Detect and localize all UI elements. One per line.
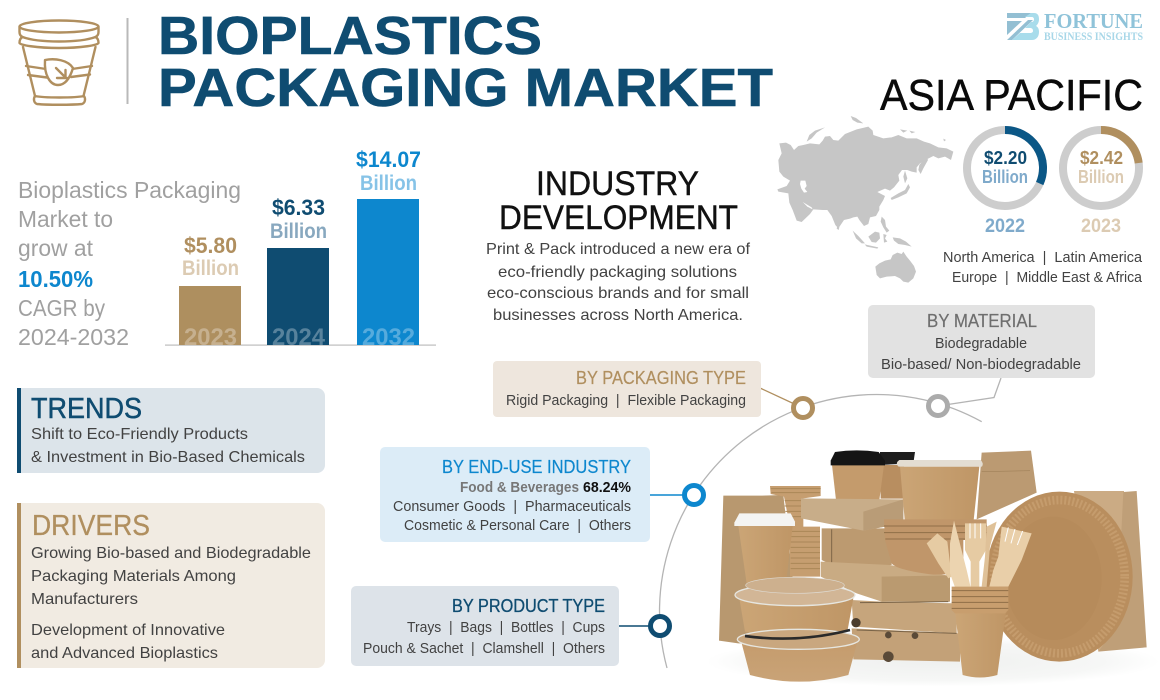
logo: Fortune Business Insights (1007, 9, 1143, 43)
text: other regions: Europe | Middle East & Africa (952, 269, 1143, 286)
text block: industry development: eco-conscious brands and for small (487, 285, 749, 302)
text block: industry development: DEVELOPMENT (499, 199, 738, 237)
text block: industry development: eco-friendly packaging solutions (498, 264, 737, 281)
large bowl with lid (900, 467, 979, 523)
icon: paper cup with leaf (20, 20, 98, 105)
panel: by end-use industry: BY END-USE INDUSTRY (442, 457, 631, 477)
text block: industry development: businesses across North America. (493, 307, 743, 324)
bar: 2023: $5.80 (184, 233, 237, 258)
right paper bag (1074, 491, 1127, 652)
logo: Fortune Business Insights: BUSINESS INSIGHTS (1044, 29, 1143, 43)
text: market growth statement: Market to (18, 206, 113, 232)
bar: 2023 (179, 233, 241, 351)
text: market growth statement: 10.50% (18, 266, 93, 292)
panel: by packaging type: Rigid Packaging | Flexible Packaging (506, 392, 746, 409)
panel: by product type: BY PRODUCT TYPE (452, 596, 605, 616)
back black-lid cup (880, 465, 904, 499)
panel: trends (17, 388, 325, 473)
top paper bag (977, 451, 1037, 519)
chart: 2023 donut: 2023 (1081, 216, 1121, 237)
text: market growth statement (18, 177, 241, 350)
panel: drivers: Growing Bio-based and Biodegradable (31, 545, 311, 562)
chart: 2023 donut (1063, 130, 1139, 237)
marker: packaging type (794, 398, 812, 418)
text: other regions: North America | Latin America (943, 249, 1143, 266)
panel: by end-use industry: Food & Beverages (460, 480, 579, 496)
text: market growth statement: 2024-2032 (18, 324, 129, 350)
bar: 2032: Billion (360, 172, 417, 195)
panel: trends: TRENDS (31, 393, 142, 425)
panel: by material: Biodegradable (935, 335, 1027, 352)
arc connecting segments (619, 378, 1001, 668)
panel: by material (868, 305, 1095, 378)
text: market growth statement: Bioplastics Packaging (18, 177, 241, 203)
chart: 2022 donut (967, 130, 1043, 237)
title: PACKAGING MARKET (158, 58, 773, 118)
panel: by packaging type (493, 361, 761, 417)
panel: trends: Shift to Eco-Friendly Products (31, 426, 248, 443)
front cup with rims (955, 612, 1006, 677)
title: BIOPLASTICS (158, 6, 542, 66)
chart: 2023 donut: $2.42 (1080, 148, 1123, 168)
text: market growth statement: CAGR by (18, 295, 105, 321)
bar: 2023: 2023 (184, 324, 237, 351)
bar chart: market size (165, 147, 436, 351)
marker: end-use industry (684, 486, 704, 504)
title (158, 6, 773, 118)
panel: by product type: Trays | Bags | Bottles | Cups (407, 619, 605, 636)
text: other regions (943, 249, 1143, 286)
bar: 2023: Billion (182, 257, 239, 280)
panel: drivers: Packaging Materials Among (31, 568, 236, 585)
logo: Fortune Business Insights: FORTUNE (1044, 9, 1143, 33)
chart: 2022 donut: $2.20 (984, 148, 1027, 168)
white-lid cup (738, 526, 793, 583)
chart: 2022 donut: 2022 (985, 216, 1025, 237)
panel: drivers (17, 503, 325, 668)
marker: product type (650, 616, 670, 636)
text block: industry development: Print & Pack introduced a new era of (486, 241, 751, 258)
map: Asia Pacific (777, 116, 953, 283)
panel: trends: & Investment in Bio-Based Chemicals (31, 449, 305, 466)
panel: drivers: and Advanced Bioplastics (31, 645, 218, 662)
panel: drivers: Development of Innovative (31, 622, 225, 639)
text block: industry development: INDUSTRY (536, 165, 699, 203)
marker: material (928, 396, 948, 416)
plastic-lid bowls (735, 577, 859, 682)
bar: 2024 (267, 195, 329, 351)
panel: by end-use industry (380, 447, 650, 542)
plate (986, 492, 1133, 662)
illustration: kraft paper packaging products (707, 450, 1160, 687)
divider (126, 18, 128, 104)
chart: 2023 donut: Billion (1078, 167, 1124, 187)
front black-lid cup (832, 465, 884, 500)
panel: by material: BY MATERIAL (927, 311, 1037, 331)
bar: 2032: 2032 (362, 324, 415, 351)
bar: 2024: Billion (270, 220, 327, 243)
bar: 2032 (356, 147, 421, 351)
panel: by end-use industry: Consumer Goods | Pharmaceuticals (393, 498, 631, 515)
box stack (801, 498, 960, 662)
wooden cutlery (927, 521, 1032, 588)
text: market growth statement: grow at (18, 235, 94, 261)
heading: Asia Pacific: ASIA PACIFIC (880, 71, 1143, 120)
panel: by product type (351, 586, 619, 666)
panel: drivers: DRIVERS (32, 510, 150, 542)
left paper bag (719, 495, 800, 643)
stacked bowl (884, 519, 987, 575)
bar: 2024: $6.33 (272, 195, 325, 220)
panel: by material: Bio-based/ Non-biodegradable (881, 356, 1081, 373)
chart: 2022 donut: Billion (982, 167, 1028, 187)
panel: by packaging type: BY PACKAGING TYPE (576, 368, 746, 388)
bar: 2024: 2024 (272, 324, 326, 351)
bar: 2032: $14.07 (356, 147, 421, 172)
panel: by end-use industry: 68.24% (583, 480, 631, 496)
stacked cups (770, 486, 821, 577)
panel: drivers: Manufacturers (31, 591, 138, 608)
panel: by product type: Pouch & Sachet | Clamshell | Others (363, 640, 605, 657)
panel: by end-use industry: Cosmetic & Personal Care | Others (404, 517, 631, 534)
text block: industry development (486, 165, 751, 324)
